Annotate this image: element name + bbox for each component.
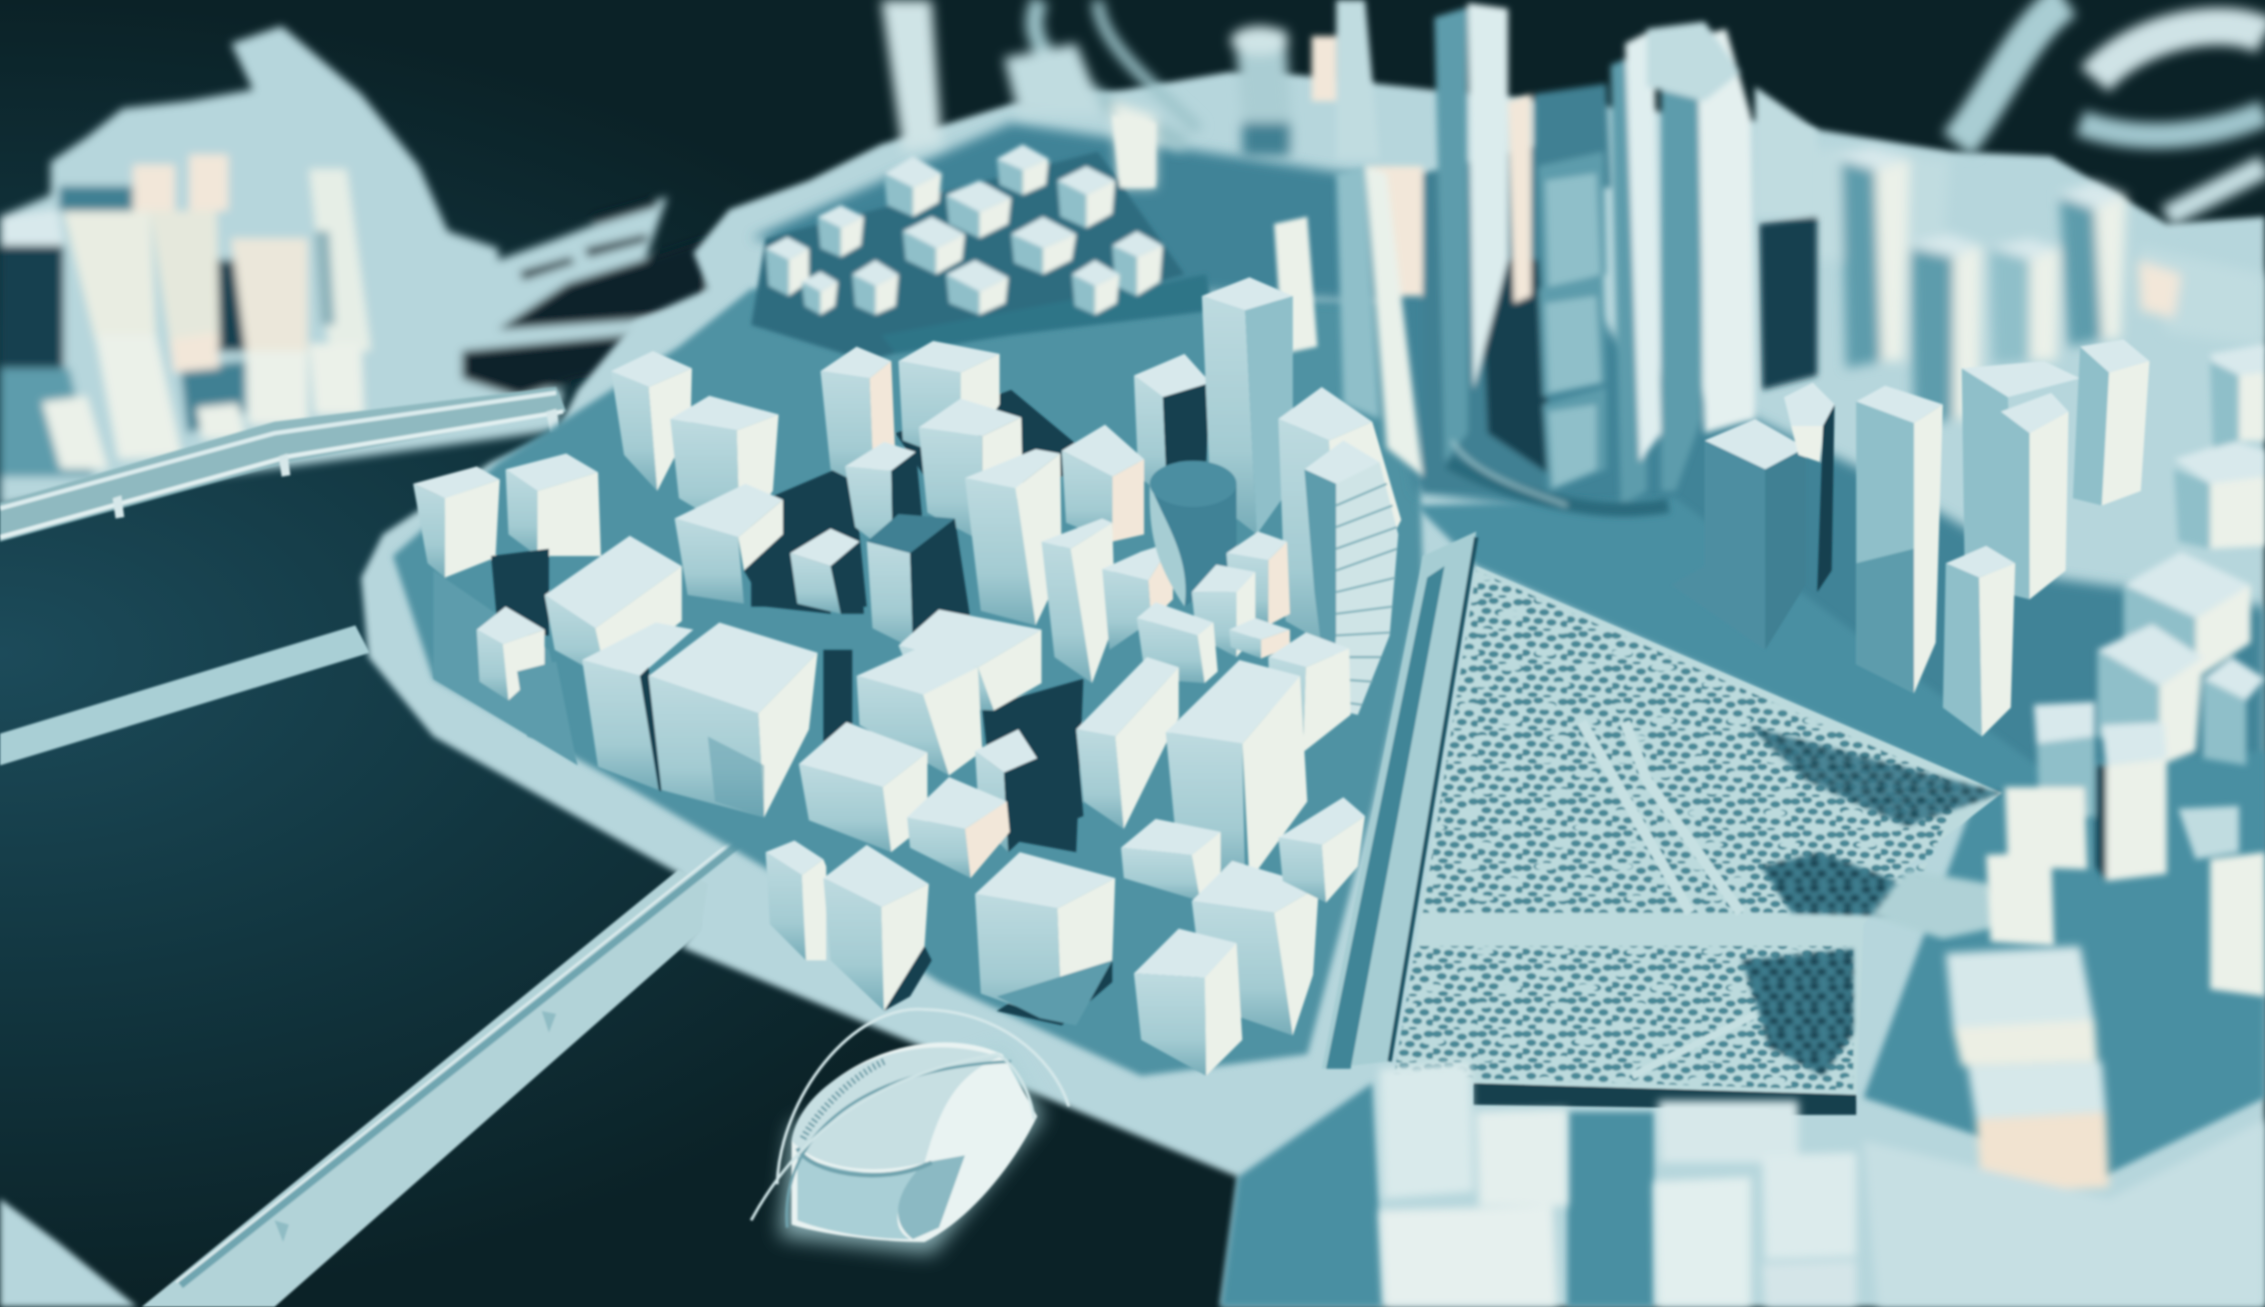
twin spire tower (1611, 22, 1755, 505)
bottom-left corner land (0, 1199, 137, 1307)
tower: east behind (1962, 339, 2149, 599)
tower: dark faceted (1671, 419, 1806, 650)
sunlit verge (1871, 869, 2011, 939)
upper ground shadow behind towers (751, 123, 2265, 895)
northeast podium tower (1278, 387, 1401, 650)
park south edge (1473, 1083, 1856, 1115)
back row (611, 341, 1211, 556)
central supertall towers (1312, 0, 1817, 509)
large front blocks (649, 609, 1041, 817)
spire tower (1336, 166, 1423, 477)
tall slab beside spire (1202, 277, 1293, 534)
east foreground boxes (1946, 946, 2109, 1191)
dark tower slab (1423, 144, 1543, 491)
tower: low east (1943, 546, 2015, 737)
front right tall blocks (975, 657, 1307, 881)
pier water notches (462, 199, 708, 397)
east district blocks (1986, 344, 2265, 996)
tower: spire far left (1312, 0, 1423, 296)
tall slim tower (1434, 3, 1531, 462)
park paths (1582, 722, 1791, 1076)
park with tree canopy (1394, 566, 2011, 1115)
park shaded trees (1742, 726, 2002, 1076)
arching structure (1034, 0, 1199, 144)
promenade beside park (1322, 531, 1476, 1069)
far right ribbons (1957, 0, 2265, 217)
blue back tower (1534, 84, 1611, 188)
tower: pentagon top (1784, 383, 1835, 592)
main waterfront district buildings (413, 277, 1401, 1076)
elevated road (1449, 462, 1668, 509)
island tower blocks (0, 155, 371, 469)
far east towers (1835, 147, 2181, 426)
observation tower (881, 0, 942, 152)
south footbridge (142, 803, 787, 1307)
northwest bridge (0, 387, 566, 542)
main land mass (361, 72, 2265, 1307)
shadow pools (433, 390, 1098, 765)
twisted tower (1304, 440, 1398, 715)
stadium on the water (751, 1009, 1069, 1254)
northwest island (0, 26, 722, 505)
east mid-ground towers (1671, 339, 2149, 737)
left cluster (413, 453, 693, 791)
blocks by cylinder (1137, 531, 1351, 752)
elevated rail (881, 274, 1213, 354)
central row (675, 425, 1173, 683)
foreground blocks south (1380, 946, 2265, 1307)
cylinder tower (1150, 461, 1237, 607)
central alley shadows (823, 650, 852, 809)
stacked tower (1538, 152, 1606, 491)
far skyline north (881, 0, 2265, 426)
south ground shadows (1221, 1083, 1654, 1307)
stadium body (751, 1009, 1069, 1242)
dark void (1481, 260, 1553, 477)
west footbridge (0, 625, 370, 765)
screw tower (1235, 29, 1293, 152)
tower: large east (1856, 386, 1943, 693)
east ground shadow (1416, 498, 2265, 1177)
east shaded towers (1759, 217, 1817, 390)
upper district small blocks (751, 116, 1317, 361)
teal ground shadow across the city (393, 289, 1423, 1076)
